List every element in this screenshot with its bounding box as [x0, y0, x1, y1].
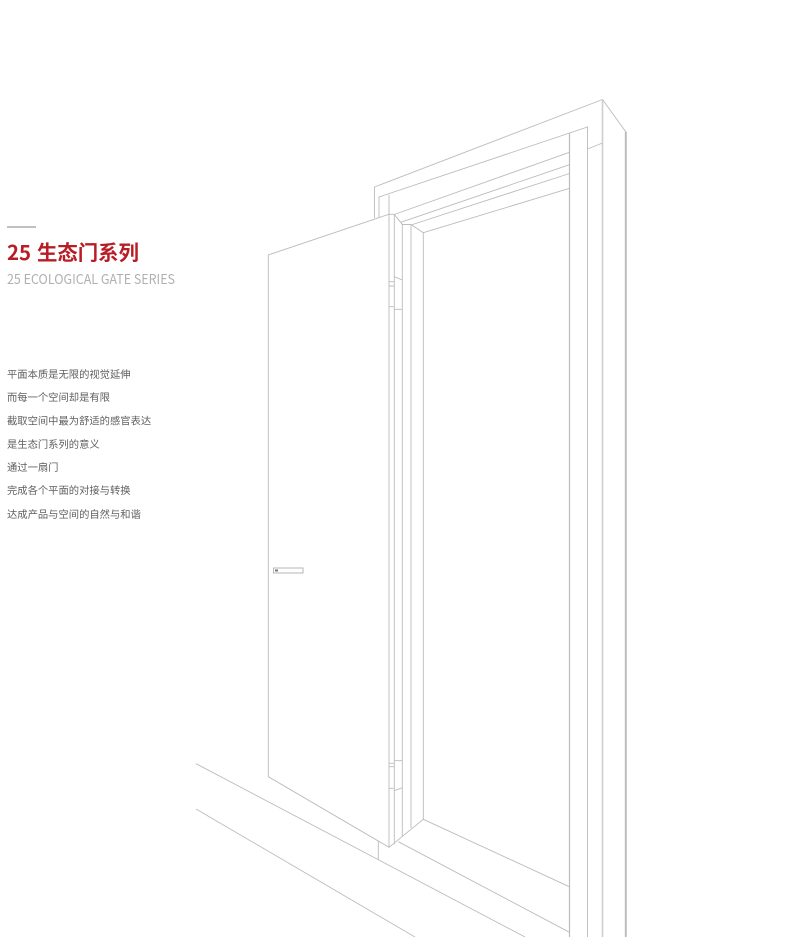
outer frame [374, 100, 626, 218]
heading rule [7, 226, 36, 228]
title: 生态门系列 [37, 236, 139, 266]
floor lines [196, 764, 525, 937]
bottom hinge [389, 761, 402, 791]
body text block: 是生态门系列的意义 [7, 436, 100, 451]
inner frame [379, 127, 588, 937]
body text block: 截取空间中最为舒适的感官表达 [7, 412, 151, 428]
body text block: 完成各个平面的对接与转换 [7, 482, 131, 497]
title: 25 [7, 236, 31, 266]
heading block [7, 227, 175, 288]
body text block [7, 366, 151, 521]
body text block: 达成产品与空间的自然与和谐 [7, 506, 141, 521]
door leaf [268, 214, 394, 847]
door handle [274, 568, 303, 573]
body text block: 而每一个空间却是有限 [7, 389, 110, 404]
threshold [389, 819, 570, 887]
top hinge [389, 277, 402, 309]
body text block: 平面本质是无限的视觉延伸 [7, 366, 131, 381]
body text block: 通过一扇门 [7, 459, 58, 474]
head jamb lines [394, 152, 570, 214]
subtitle: 25 ECOLOGICAL GATE SERIES [7, 268, 175, 288]
jamb reveal [394, 214, 423, 819]
door frame illustration [196, 100, 626, 937]
